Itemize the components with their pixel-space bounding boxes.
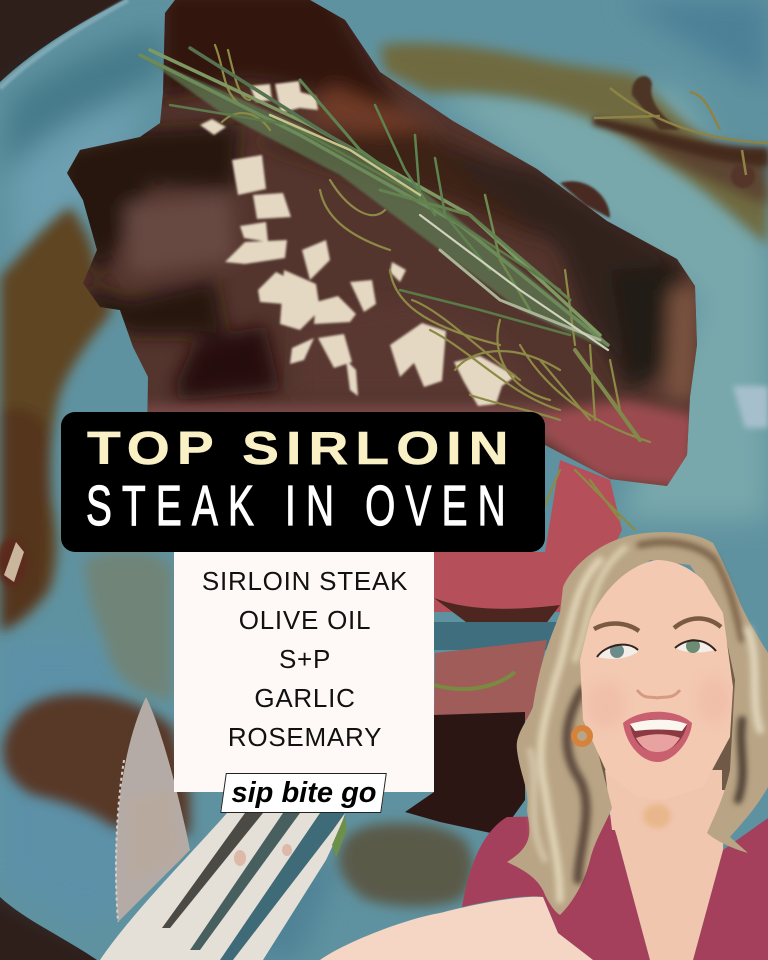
neck shadow <box>643 804 671 828</box>
fork <box>100 813 347 960</box>
ingredient: sirloin steak: SIRLOIN STEAK <box>202 566 408 596</box>
knife <box>116 697 190 922</box>
foreground hand <box>320 897 593 960</box>
plate rim <box>0 0 128 88</box>
title line 2: STEAK IN OVEN <box>86 474 516 538</box>
hair behind the face <box>585 640 735 790</box>
bundle stems <box>140 48 640 440</box>
earring <box>574 728 590 744</box>
cheek blush <box>586 681 626 729</box>
ingredient: rosemary: ROSEMARY <box>228 722 382 752</box>
steak <box>60 0 700 490</box>
garlic pieces <box>200 81 516 406</box>
title line 1: TOP SIRLOIN <box>87 422 516 474</box>
face <box>580 560 733 800</box>
presenter <box>320 532 768 960</box>
eyebrows <box>594 618 721 631</box>
ingredient: garlic: GARLIC <box>254 683 356 713</box>
neck <box>605 770 722 830</box>
curling yellow-green leaves <box>215 45 650 530</box>
chest <box>600 780 725 960</box>
ingredient list panel <box>174 552 434 792</box>
nose <box>637 690 680 698</box>
dress <box>462 815 768 960</box>
hair left <box>507 533 650 915</box>
hair right <box>645 532 768 853</box>
logo: sip bite go <box>220 773 387 813</box>
bundle mass <box>140 55 608 350</box>
hair strands <box>530 542 760 900</box>
title banner <box>61 412 545 552</box>
logo: sip bite go: sip bite go <box>232 777 376 809</box>
steak slices under title <box>405 460 622 835</box>
eyes <box>597 645 638 659</box>
mouth <box>623 712 692 762</box>
rosemary sprig <box>140 45 650 530</box>
ingredient: salt and pepper: S+P <box>279 644 331 674</box>
ingredient: olive oil: OLIVE OIL <box>239 605 371 635</box>
juice sprig and drops on plate <box>0 76 768 586</box>
